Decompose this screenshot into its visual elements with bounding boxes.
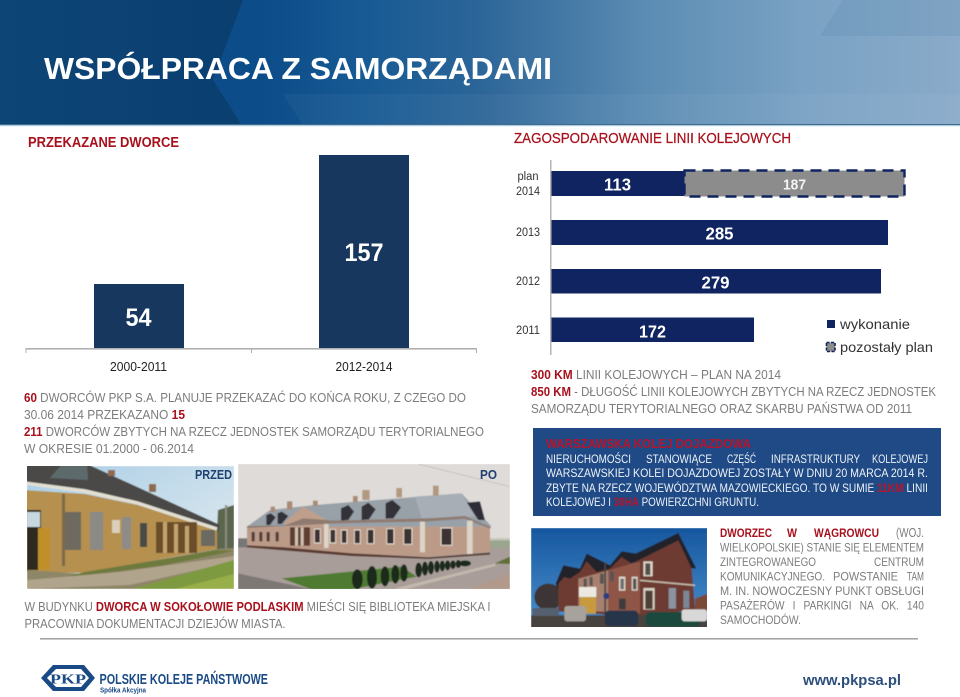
callout: warszawska kolej dojazdowa: INFRASTRUKTURY <box>771 453 860 466</box>
callout: warszawska kolej dojazdowa: WARSZAWSKA KOLEJ DOJAZDOWA <box>546 437 751 451</box>
bar chart: railway lines by year: 172 <box>639 322 666 342</box>
text block: railway summary: 300 KM LINII KOLEJOWYCH – PLAN NA 2014 <box>531 368 781 382</box>
bar chart: railway lines by year: plan <box>518 171 538 183</box>
callout: warszawska kolej dojazdowa: ZBYTE NA RZECZ WOJEWÓDZTWA MAZOWIECKIEGO. TO W SUMIE 11KM LINII <box>546 482 928 495</box>
callout: warszawska kolej dojazdowa: CZĘŚĆ <box>727 453 756 466</box>
heading: przekazane dworce: PRZEKAZANE DWORCE <box>28 135 179 151</box>
callout: warszawska kolej dojazdowa: WARSZAWSKIEJ KOLEI DOJAZDOWEJ ZOSTAŁY W DNIU 20 MARCA 2014 R. <box>546 467 928 480</box>
bar chart: stations handed over: 157 <box>344 239 384 267</box>
icon: pkp hexagon: PKP <box>50 672 87 688</box>
bar chart: railway lines by year: 2014 <box>516 186 541 198</box>
text block: dworzec w wągrowcu: WIELKOPOLSKIE) STANIE SIĘ ELEMENTEM <box>720 540 924 554</box>
callout: warszawska kolej dojazdowa: STANOWIĄCE <box>646 453 712 466</box>
text block: dworzec w wągrowcu: DWORZEC <box>720 526 772 540</box>
text block: stations summary: 60 DWORCÓW PKP S.A. PLANUJE PRZEKAZAĆ DO KOŃCA ROKU, Z CZEGO DO <box>24 390 466 405</box>
legend: wykonanie <box>839 316 910 332</box>
text block: dworzec w wągrowcu: TAM <box>907 570 924 584</box>
text block: dworzec w wągrowcu: CENTRUM <box>874 555 924 569</box>
header banner <box>0 0 960 127</box>
callout: warszawska kolej dojazdowa: KOLEJOWEJ I 30HA POWIERZCHNI GRUNTU. <box>546 496 759 509</box>
label: po: PO <box>480 468 497 482</box>
text block: stations summary: 211 DWORCÓW ZBYTYCH NA RZECZ JEDNOSTEK SAMORZĄDU TERYTORIALNEGO <box>24 424 484 439</box>
text block: dworzec w wągrowcu: KOMUNIKACYJNEGO. <box>720 570 825 584</box>
bar chart: railway lines by year: 2012 <box>516 276 540 288</box>
panel: przekazane dworce <box>24 135 484 456</box>
text block: dworzec w wągrowcu: SAMOCHODÓW. <box>720 613 801 627</box>
photo: wągrowiec station <box>531 528 708 628</box>
text block: dworzec w wągrowcu: M. IN. NOWOCZESNY PUNKT OBSŁUGI <box>720 584 924 598</box>
logo: pkp: Spółka Akcyjna <box>100 686 147 694</box>
legend: pozostały plan <box>840 339 933 355</box>
photo: station before renovation <box>24 464 234 589</box>
text block: dworzec w wągrowcu: W <box>787 526 798 540</box>
bar chart: stations handed over <box>26 155 477 374</box>
photo: station after renovation <box>238 464 510 589</box>
label: przed: PRZED <box>195 468 232 482</box>
bar chart: railway lines by year: 113 <box>604 174 631 194</box>
text block: dworzec w wągrowcu: ZINTEGROWANEGO <box>720 555 816 569</box>
text block: dworzec w wągrowcu: POWSTANIE <box>833 570 898 584</box>
icon: pkp hexagon <box>41 665 95 691</box>
bar chart: railway lines by year: 2011 <box>516 325 540 337</box>
title: WSPÓŁPRACA Z SAMORZĄDAMI <box>44 50 552 86</box>
bar chart: stations handed over: 54 <box>126 304 152 332</box>
bar chart: stations handed over: 2000-2011 <box>110 360 167 374</box>
text block: railway summary <box>531 368 937 416</box>
bar chart: railway lines by year: 2013 <box>516 227 540 239</box>
callout: warszawska kolej dojazdowa: KOLEJOWEJ <box>872 453 928 466</box>
bar chart: railway lines by year: 285 <box>706 224 734 244</box>
bar chart: railway lines by year <box>516 160 904 355</box>
bar chart: railway lines by year: 279 <box>702 272 730 292</box>
website url: www.pkpsa.pl <box>802 673 901 689</box>
text block: sokołów podlaski: PRACOWNIA DOKUMENTACJI DZIEJÓW MIASTA. <box>24 616 286 631</box>
callout: warszawska kolej dojazdowa <box>533 428 941 516</box>
text block: dworzec w wągrowcu <box>720 526 924 627</box>
text block: dworzec w wągrowcu: WĄGROWCU <box>814 526 879 540</box>
panel: zagospodarowanie linii kolejowych <box>514 131 941 516</box>
bar chart: stations handed over: 2012-2014 <box>336 360 393 374</box>
logo: pkp <box>41 665 268 694</box>
text block: stations summary <box>24 390 484 456</box>
text block: stations summary: W OKRESIE 01.2000 - 06.2014 <box>24 442 194 456</box>
text block: sokołów podlaski: W BUDYNKU DWORCA W SOKOŁOWIE PODLASKIM MIEŚCI SIĘ BIBLIOTEKA MIEJSKA I <box>24 599 490 614</box>
text block: stations summary: 30.06 2014 PRZEKAZANO 15 <box>24 408 185 422</box>
text block: dworzec w wągrowcu: PASAŻERÓW I PARKINGI NA OK. 140 <box>720 598 924 612</box>
callout: warszawska kolej dojazdowa: NIERUCHOMOŚCI <box>546 453 631 466</box>
text block: sokołów podlaski <box>24 599 490 631</box>
text block: railway summary: SAMORZĄDU TERYTORIALNEGO ORAZ SKARBU PAŃSTWA OD 2011 <box>531 401 912 416</box>
bar chart: railway lines by year: 187 <box>783 176 806 194</box>
heading: zagospodarowanie linii kolejowych: ZAGOSPODAROWANIE LINII KOLEJOWYCH <box>514 131 791 147</box>
legend <box>826 316 933 355</box>
logo: pkp: POLSKIE KOLEJE PAŃSTWOWE <box>100 671 268 688</box>
text block: dworzec w wągrowcu: (WOJ. <box>896 526 924 540</box>
